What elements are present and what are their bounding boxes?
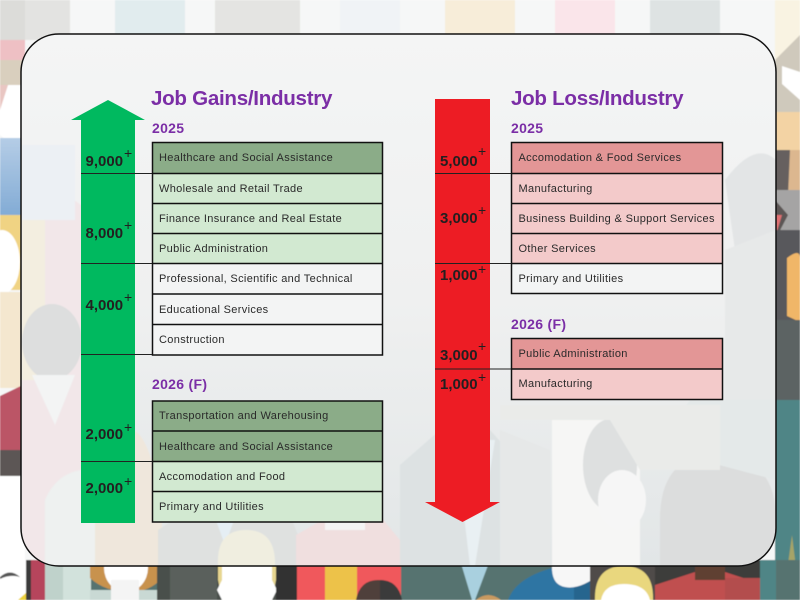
value labels: gains: + [124,217,132,233]
value labels: losses: 1,000 [440,376,478,393]
value labels: losses: 5,000 [440,153,478,170]
value labels: losses: 3,000 [440,210,478,227]
figure: left edge people [0,0,25,566]
connector lines: gains tiers [81,174,152,462]
heading: Job Gains/Industry: Job Gains/Industry [151,87,333,110]
value labels: losses: + [478,369,486,385]
value labels: losses: + [478,143,486,159]
figure: right edge people [775,0,800,600]
value labels: losses: + [478,202,486,218]
table: job gains 2025: Finance Insurance and Real Estate [159,213,342,225]
table: job gains 2025: Educational Services [159,304,269,316]
value labels: gains: 8,000 [86,225,123,242]
value labels: gains: + [124,145,132,161]
table: job loss 2025 [512,142,722,294]
value labels: gains: + [124,289,132,305]
arrow: job gains, green upward [71,100,145,523]
table: job loss 2026 forecast: Manufacturing [518,378,593,390]
heading: gains 2025: 2025 [152,120,184,136]
value labels: losses: 1,000 [440,267,478,284]
heading: loss 2026 forecast: 2026 (F) [511,316,566,332]
table: job loss 2025: Business Building & Support Services [518,213,715,225]
figure: top row tones [25,0,720,40]
table: job gains 2025: Professional, Scientific and Technical [159,273,353,285]
table: job gains 2026 forecast [152,401,382,522]
value labels: gains: 2,000 [86,480,123,497]
table: job gains 2026 forecast: Healthcare and Social Assistance [159,441,333,453]
table: job gains 2025 [152,142,382,355]
value labels: losses [440,143,486,393]
table: job gains 2025: Construction [159,334,225,346]
table: job gains 2025: Healthcare and Social Assistance [159,152,333,164]
table: job loss 2025: Manufacturing [518,183,593,195]
value labels: losses: 3,000 [440,347,478,364]
value labels: losses: + [478,261,486,277]
value labels: gains [86,145,132,497]
connector lines: loss tiers [435,174,511,369]
table: job gains 2025: Public Administration [159,243,268,255]
value labels: gains: 2,000 [86,426,123,443]
table: job loss 2025: Primary and Utilities [518,273,624,285]
value labels: gains: 9,000 [86,153,123,170]
heading: Job Loss/Industry: Job Loss/Industry [511,87,684,110]
table: job gains 2026 forecast: Primary and Utilities [159,501,264,513]
arrow: job loss, red downward [425,99,500,522]
value labels: gains: + [124,419,132,435]
table: job loss 2025: Other Services [518,243,596,255]
table: job loss 2026 forecast: Public Administration [518,348,628,360]
table: job gains 2026 forecast: Transportation and Warehousing [159,410,329,422]
value labels: gains: 4,000 [86,297,123,314]
value labels: gains: + [124,473,132,489]
figure: bottom row of people [0,544,800,600]
table: job gains 2026 forecast: Accomodation and Food [159,471,285,483]
table: job loss 2025: Accomodation & Food Services [518,152,682,164]
heading: gains 2026 forecast: 2026 (F) [152,376,207,392]
value labels: losses: + [478,338,486,354]
table: job gains 2025: Wholesale and Retail Trade [159,183,303,195]
panel: faded crowd shapes [22,145,776,566]
table: job loss 2026 forecast [512,338,722,400]
heading: loss 2025: 2025 [511,120,543,136]
